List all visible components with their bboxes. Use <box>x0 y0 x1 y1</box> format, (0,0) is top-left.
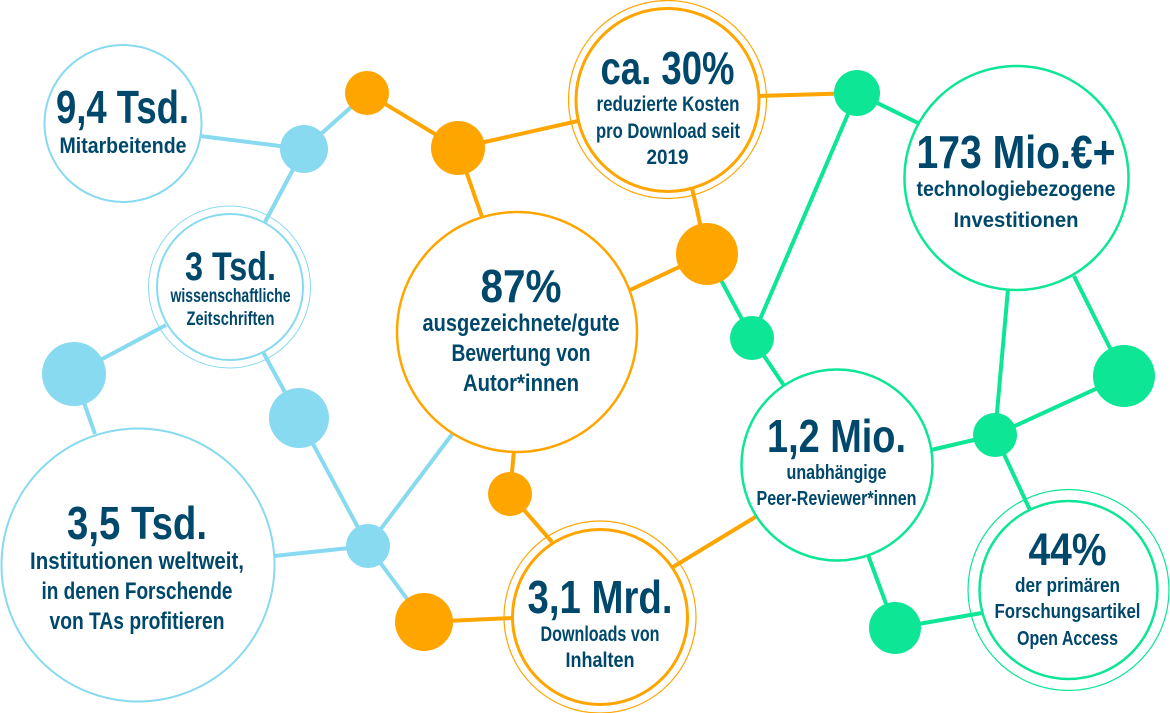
stat: 1,2 Mio.: unabhängige <box>786 462 886 484</box>
stat: 1,2 Mio. <box>742 370 932 560</box>
stat: ca. 30%: pro Download seit <box>596 120 740 143</box>
stat: 3 Tsd. <box>148 206 310 368</box>
node: blue middle <box>269 388 329 448</box>
stat: 3,5 Tsd. <box>2 428 274 702</box>
stat: 44% <box>968 490 1169 690</box>
stat: 87% <box>397 212 637 452</box>
node: green top <box>834 70 880 116</box>
stat: 44%: Open Access <box>1017 628 1118 650</box>
node: green middle <box>730 316 774 360</box>
stat: 9,4 Tsd.: 9,4 Tsd. <box>56 81 189 133</box>
stat: 1,2 Mio.: 1,2 Mio. <box>767 410 906 462</box>
stat: 3,1 Mrd.: 3,1 Mrd. <box>528 571 672 623</box>
stat: 3,5 Tsd.: in denen Forschende <box>42 578 232 605</box>
node: orange top left <box>345 71 389 115</box>
stat: 87%: Bewertung von <box>452 340 590 367</box>
stat: 1,2 Mio.: Peer-Reviewer*innen <box>756 488 916 510</box>
stat: ca. 30%: 2019 <box>646 146 688 169</box>
node: blue bottom <box>346 524 390 568</box>
stat: ca. 30% <box>568 0 766 198</box>
node: orange bottom <box>395 593 453 651</box>
stat: 3,5 Tsd.: 3,5 Tsd. <box>67 497 207 549</box>
stat: 87%: ausgezeichnete/gute <box>422 310 620 337</box>
node: orange lower <box>488 472 532 516</box>
node: green bottom <box>869 602 921 654</box>
stat: 3 Tsd.: Zeitschriften <box>186 309 274 330</box>
stat: 3,5 Tsd.: Institutionen weltweit, <box>30 548 244 575</box>
stat: 44%: Forschungsartikel <box>994 601 1140 623</box>
stat: 9,4 Tsd.: Mitarbeitende <box>60 133 186 158</box>
node: green right <box>1093 345 1155 407</box>
stat: 3,5 Tsd.: von TAs profitieren <box>50 608 224 635</box>
stat: 3 Tsd.: wissenschaftliche <box>170 286 290 307</box>
stat: 87%: 87% <box>480 260 562 312</box>
orange connectors <box>367 93 857 622</box>
stat: 3,1 Mrd. <box>504 521 696 713</box>
node: blue large left <box>42 342 106 406</box>
stat: 3,1 Mrd.: Downloads von <box>540 623 660 646</box>
stat: 173 Mio.€+: Investitionen <box>954 209 1078 232</box>
stat: 87%: Autor*innen <box>463 370 579 397</box>
stat: 3,1 Mrd.: Inhalten <box>566 649 634 672</box>
node: orange top <box>431 121 485 175</box>
node: green hub <box>973 413 1017 457</box>
node: orange right <box>676 223 738 285</box>
stat: 44%: der primären <box>1015 575 1120 597</box>
stat: ca. 30%: reduzierte Kosten <box>596 93 740 116</box>
stat: 173 Mio.€+: 173 Mio.€+ <box>916 126 1116 178</box>
green connectors <box>707 93 1124 628</box>
stat: 9,4 Tsd. <box>44 45 202 202</box>
stat: 173 Mio.€+: technologiebezogene <box>916 178 1116 201</box>
node: blue small top <box>280 125 328 173</box>
stat: 3 Tsd.: 3 Tsd. <box>185 245 276 289</box>
blue connectors <box>74 93 453 622</box>
stat: 173 Mio.€+ <box>904 66 1128 290</box>
stat: 44%: 44% <box>1028 524 1106 575</box>
stat: ca. 30%: ca. 30% <box>600 42 734 94</box>
